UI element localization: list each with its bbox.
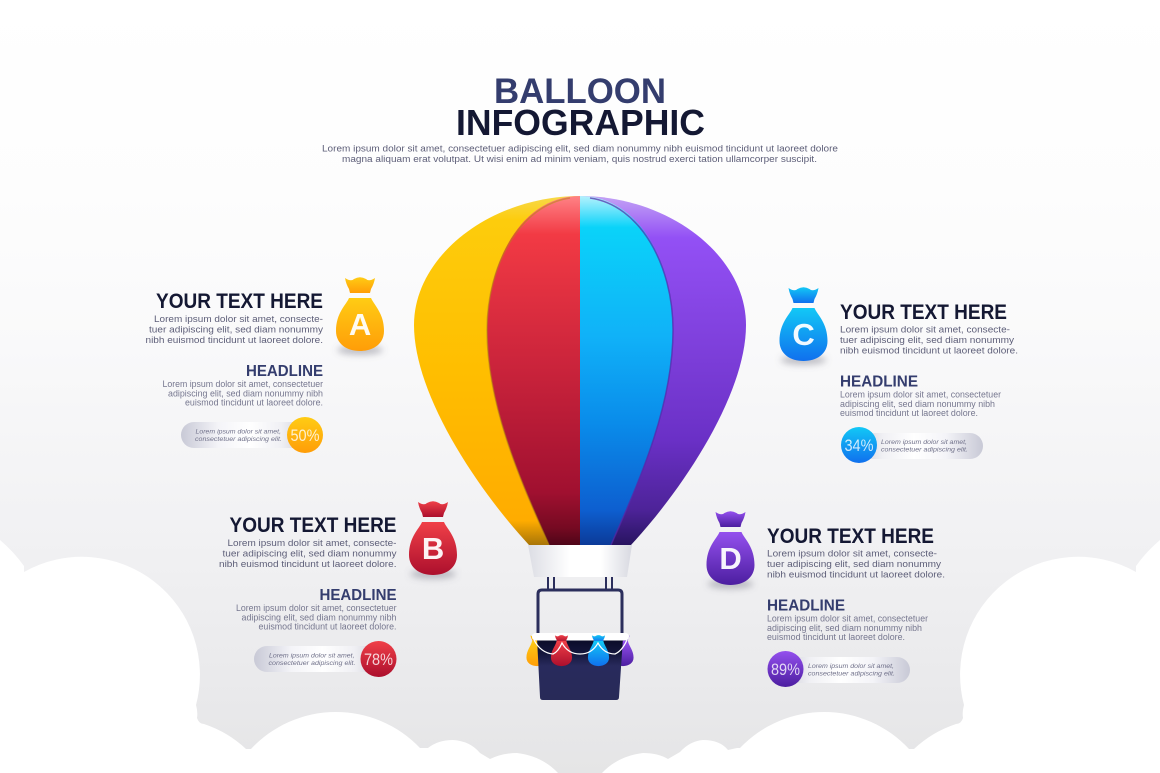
- detail text D: euismod tincidunt ut laoreet dolore.: [767, 632, 905, 642]
- percentage pill A: Lorem ipsum dolor sit amet,: [196, 428, 281, 436]
- panel A: [146, 277, 384, 453]
- icon: bag C: [780, 287, 828, 365]
- title: INFOGRAPHIC: [456, 102, 705, 143]
- balloon envelope: [414, 196, 746, 545]
- detail text C: Lorem ipsum dolor sit amet, consectetuer: [840, 390, 1001, 400]
- text block C: Lorem ipsum dolor sit amet, consecte-: [840, 324, 1010, 336]
- percentage pill B: [254, 641, 396, 677]
- percentage pill C: consectetuer adipiscing elit.: [881, 446, 968, 454]
- detail text A: [162, 379, 323, 408]
- detail text C: adipiscing elit, sed diam nonummy nibh: [840, 399, 995, 409]
- text block D: tuer adipiscing elit, sed diam nonummy: [767, 559, 941, 570]
- balloon collar: [528, 545, 632, 577]
- panel B: [219, 501, 457, 677]
- percentage pill B: Lorem ipsum dolor sit amet,: [269, 652, 355, 660]
- title: BALLOON: [494, 72, 666, 111]
- panel D: [706, 511, 945, 687]
- basket rim: [532, 633, 629, 640]
- detail text D: Lorem ipsum dolor sit amet, consectetuer: [767, 614, 928, 624]
- text block A: nibh euismod tincidunt ut laoreet dolore.: [146, 335, 323, 346]
- intro text: Lorem ipsum dolor sit amet, consectetuer adipiscing elit, sed diam nonummy nibh euismod tincidunt ut laoreet dolore: [322, 144, 838, 154]
- small bag: purple: [612, 635, 634, 666]
- detail text C: euismod tincidunt ut laoreet dolore.: [840, 408, 978, 418]
- text block A: [146, 314, 323, 346]
- text block A: Lorem ipsum dolor sit amet, consecte-: [154, 314, 323, 325]
- icon: bag C: C: [792, 317, 815, 352]
- detail text A: Lorem ipsum dolor sit amet, consectetuer: [162, 379, 323, 389]
- headline B: HEADLINE: [320, 587, 396, 604]
- hot air balloon: [414, 196, 746, 700]
- percentage pill A: 50%: [290, 426, 320, 445]
- detail text C: [840, 390, 1001, 418]
- small bag: blue: [588, 635, 609, 666]
- headline D: HEADLINE: [767, 598, 845, 614]
- percentage pill D: 89%: [771, 660, 800, 679]
- heading B: YOUR TEXT HERE: [230, 513, 396, 537]
- icon: bag A: [336, 277, 384, 355]
- icon: bag D: D: [719, 541, 742, 576]
- panel C: [780, 287, 1018, 463]
- percentage pill D: Lorem ipsum dolor sit amet,: [808, 663, 894, 670]
- icon: bag D: [706, 511, 754, 589]
- text block D: [767, 548, 945, 580]
- percentage pill D: consectetuer adipiscing elit.: [808, 670, 895, 678]
- basket body: [537, 638, 623, 700]
- small bag: red: [551, 635, 572, 666]
- percentage pill A: consectetuer adipiscing elit.: [195, 436, 282, 443]
- clouds: [0, 540, 1160, 773]
- garland: [534, 640, 627, 654]
- icon: bag A: A: [349, 307, 371, 342]
- icon: bag B: [409, 501, 457, 579]
- detail text B: euismod tincidunt ut laoreet dolore.: [258, 622, 396, 632]
- text block A: tuer adipiscing elit, sed diam nonummy: [149, 324, 323, 336]
- percentage pill D: [768, 651, 910, 687]
- detail text D: [767, 614, 928, 642]
- text block C: nibh euismod tincidunt ut laoreet dolore.: [840, 346, 1018, 356]
- percentage pill C: 34%: [844, 436, 874, 455]
- text block D: Lorem ipsum dolor sit amet, consecte-: [767, 548, 937, 560]
- small bag: yellow: [526, 635, 548, 666]
- percentage pill C: [841, 427, 983, 463]
- icon: bag B: B: [422, 531, 444, 566]
- percentage pill A: [181, 417, 323, 453]
- percentage pill C: Lorem ipsum dolor sit amet,: [881, 439, 967, 446]
- text block B: Lorem ipsum dolor sit amet, consecte-: [228, 538, 396, 549]
- intro text: magna aliquam erat volutpat. Ut wisi enim ad minim veniam, quis nostrud exerci tation ullamcorper suscipit.: [342, 154, 817, 165]
- percentage pill B: consectetuer adipiscing elit.: [268, 660, 356, 667]
- title: [456, 72, 705, 143]
- detail text D: adipiscing elit, sed diam nonummy nibh: [767, 623, 922, 633]
- basket frame: [538, 590, 622, 634]
- intro text: [322, 144, 838, 165]
- heading C: YOUR TEXT HERE: [840, 300, 1007, 324]
- text block D: nibh euismod tincidunt ut laoreet dolore.: [767, 570, 945, 580]
- detail text A: adipiscing elit, sed diam nonummy nibh: [168, 388, 323, 398]
- text block B: [219, 538, 397, 570]
- heading A: YOUR TEXT HERE: [156, 289, 323, 313]
- detail text B: Lorem ipsum dolor sit amet, consectetuer: [236, 603, 396, 613]
- text block B: tuer adipiscing elit, sed diam nonummy: [222, 548, 397, 560]
- text block B: nibh euismod tincidunt ut laoreet dolore.: [219, 559, 396, 570]
- headline A: HEADLINE: [246, 363, 323, 380]
- text block C: [840, 324, 1018, 356]
- detail text B: adipiscing elit, sed diam nonummy nibh: [242, 612, 396, 622]
- heading D: YOUR TEXT HERE: [767, 524, 934, 548]
- percentage pill B: 78%: [364, 650, 393, 669]
- ropes: [548, 577, 612, 590]
- detail text B: [236, 603, 396, 632]
- text block C: tuer adipiscing elit, sed diam nonummy: [840, 335, 1014, 346]
- detail text A: euismod tincidunt ut laoreet dolore.: [185, 398, 323, 408]
- headline C: HEADLINE: [840, 374, 918, 390]
